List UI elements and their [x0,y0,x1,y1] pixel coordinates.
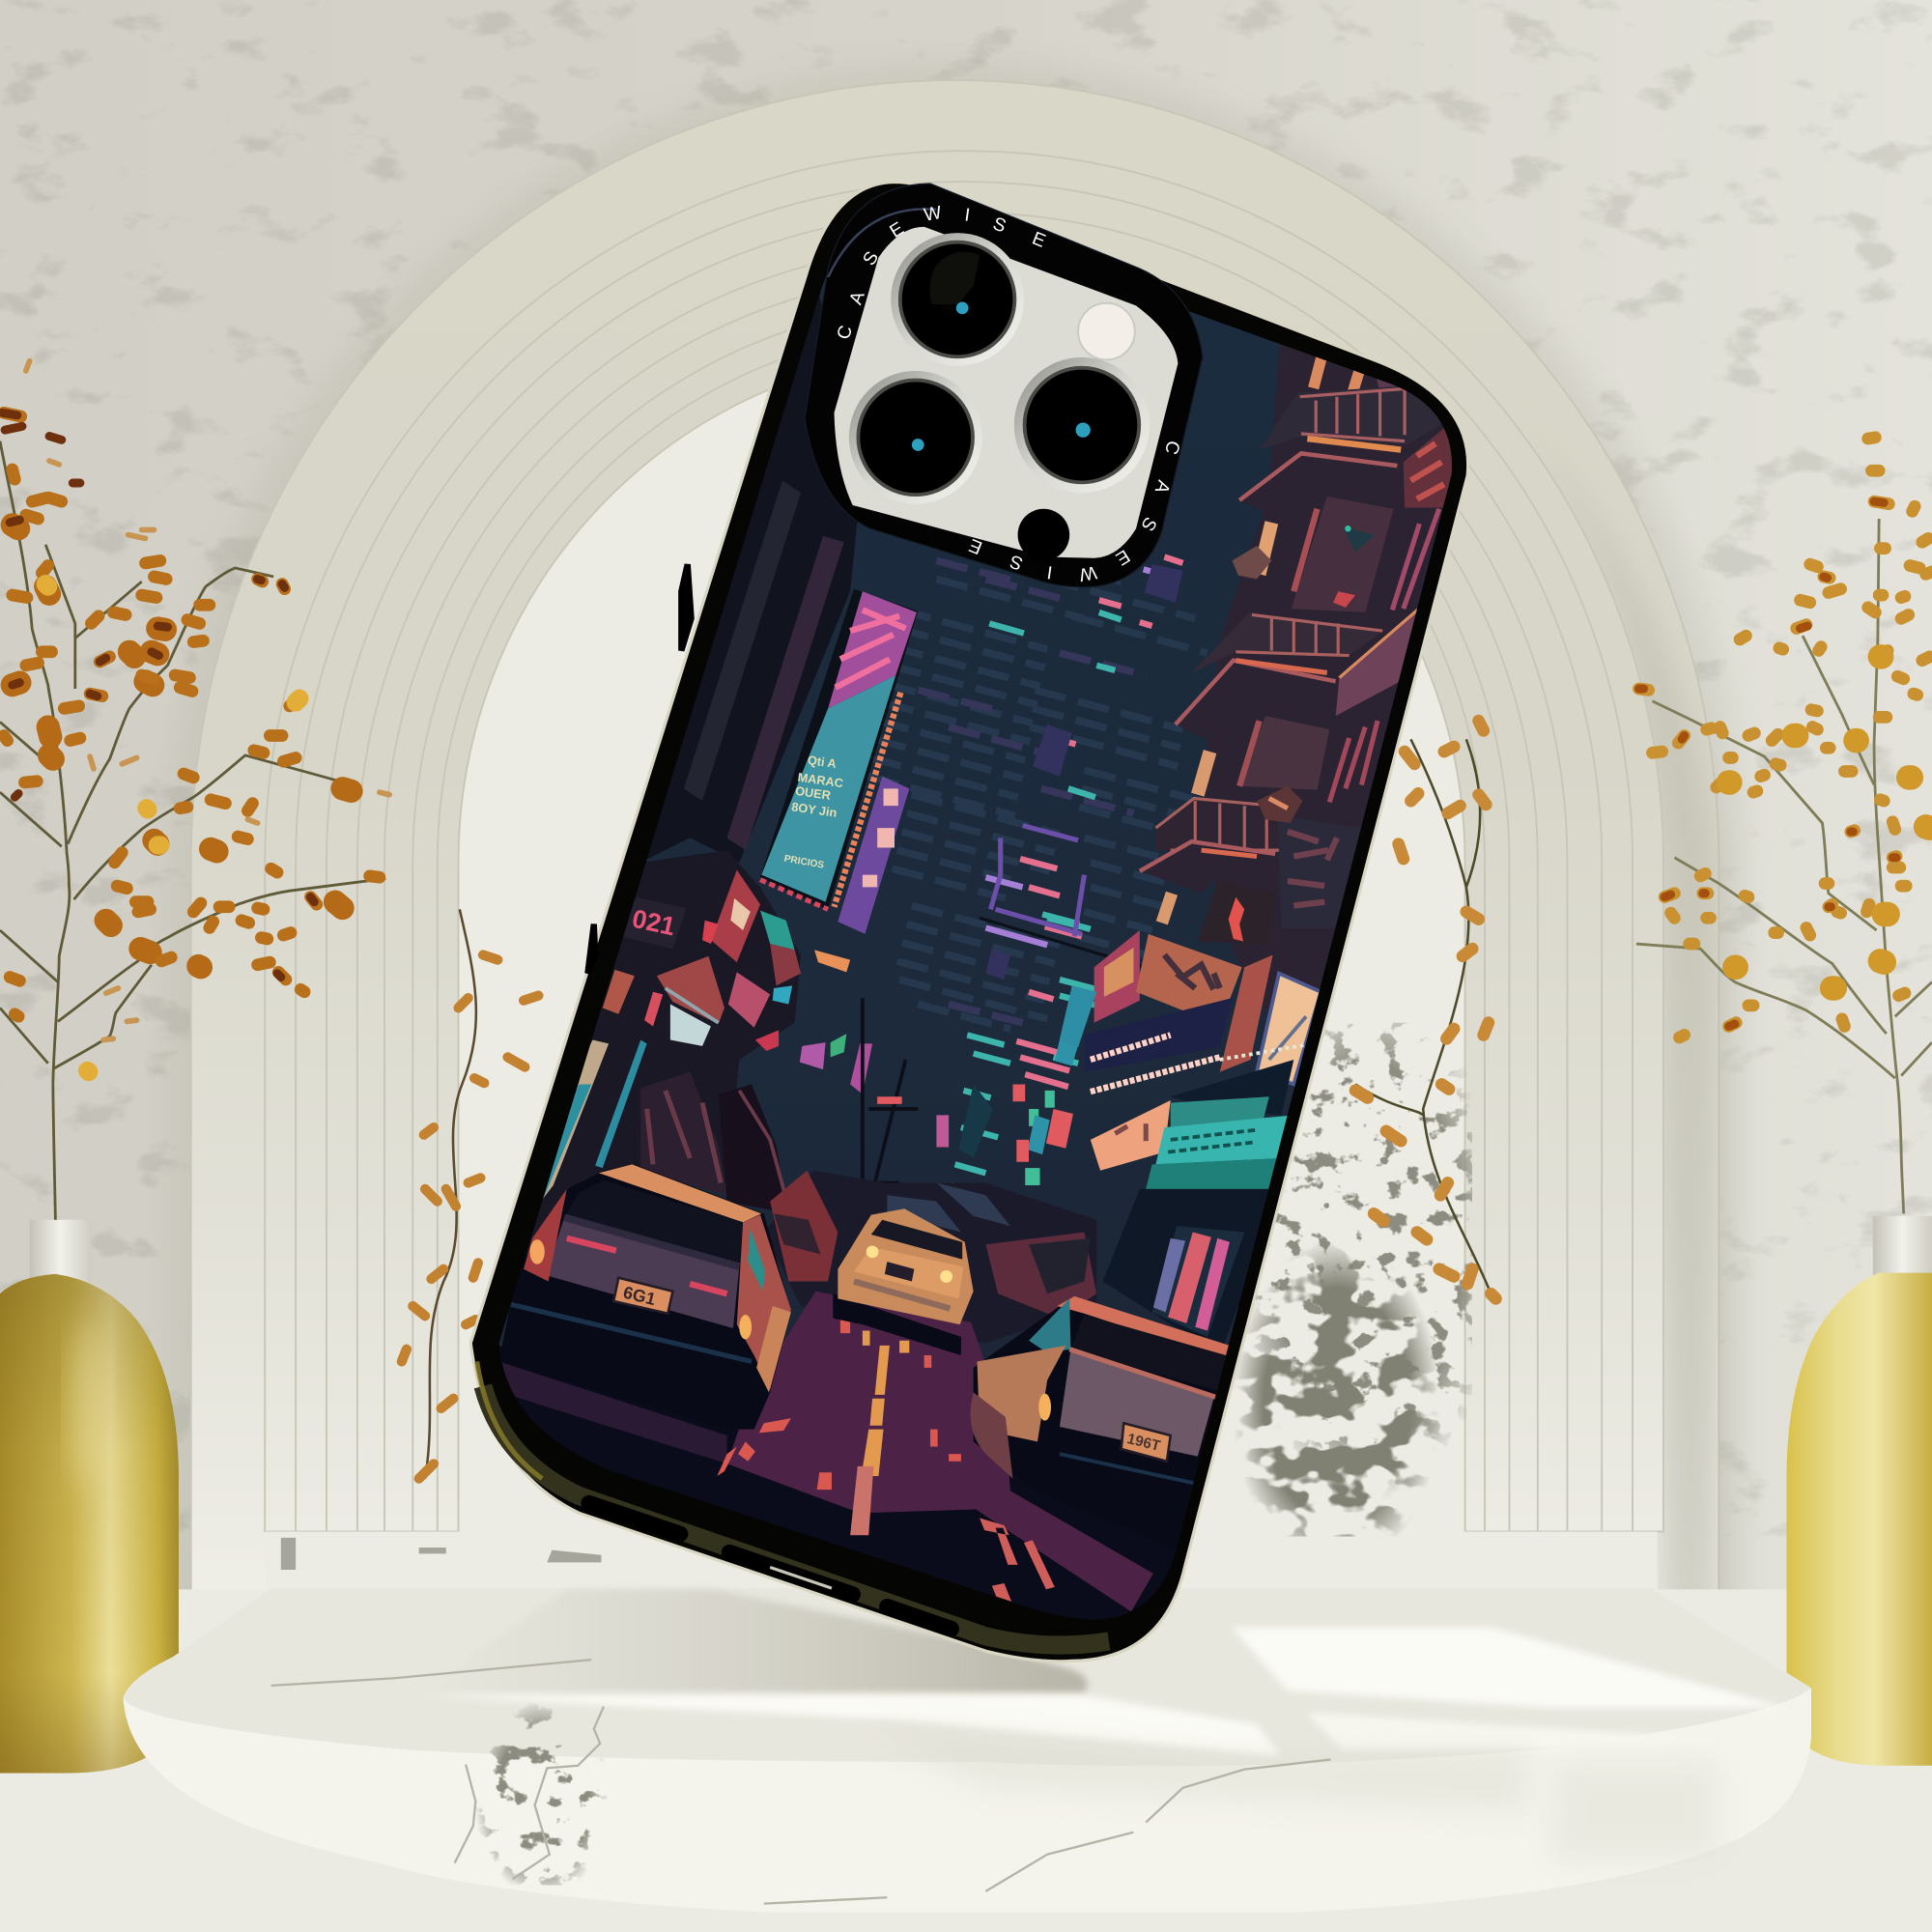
brand ring text: W [1078,561,1098,584]
billboard lettering: 8OY Jin [790,799,838,820]
top posts [1308,357,1364,390]
marquee lights [1084,998,1306,1115]
brand ring text: S [990,213,1009,237]
brand ring text: C [1160,438,1183,457]
brand ring text: C [834,323,857,342]
brand ring text: E [887,218,908,242]
dark foreground ground [487,1343,1233,1651]
stepped arch niche [166,62,1744,1651]
pedestrians [640,1072,727,1195]
balcony two [1174,608,1418,740]
printed pixel city artwork [498,275,1452,1619]
centre taxi [833,1208,974,1355]
billboard lettering [783,753,844,871]
orange sign block [1061,930,1321,1084]
medium leaves [4,412,380,1016]
licence plate left: 6G1 [621,1283,658,1309]
thin leaves [26,361,389,1040]
brand ring text: A [846,289,869,307]
brand ring text: I [963,205,971,226]
billboard lettering: Qti A [807,753,838,771]
main lens [891,233,1024,366]
round leaves [13,525,352,967]
floor [0,1589,1932,1932]
left street shops [526,850,872,1254]
brand ring text: A [1151,477,1174,497]
lower column [1198,716,1378,802]
bottom edge sheen [483,1386,1109,1645]
left taxi [499,1164,791,1430]
right lens [1014,357,1150,493]
balcony one [1238,386,1452,511]
brand ring text: S [1008,551,1026,574]
microphone dot [1018,509,1069,560]
021 sign [621,895,686,949]
left gold vase [0,1220,179,1773]
red figure window [1198,881,1275,945]
stems [0,441,385,1220]
distant skyline rows [867,542,1233,1029]
brand ring text [834,203,1183,584]
billboard [760,589,918,909]
right tower [1138,344,1452,1014]
case body with cream rim highlight [470,183,1468,1662]
mid-street signs [860,987,1078,1185]
camera island [805,184,1203,587]
right hanging vine [1355,721,1495,1298]
marble cracks on pedestal [271,1660,1331,1904]
left dark building [647,296,858,863]
dark leaves [3,412,314,977]
distant skyline highlights [952,557,1182,1191]
side buttons [587,564,692,974]
gold leaves [1638,438,1932,1037]
brand ring text: S [1136,513,1160,534]
left golden branch tree [0,361,389,1220]
billboard lettering: OUER [794,783,832,803]
left hanging vine [402,909,538,1479]
brand ring text: E [966,534,985,557]
left road strip [493,1361,727,1463]
camera plateau [835,227,1178,558]
lower-left lens [849,371,982,504]
brand ring text: E [1112,545,1133,569]
phone case [469,173,1491,1662]
billboard lettering: MARAC [797,770,844,790]
upper column with mask [1233,497,1439,612]
purple vertical sign [838,777,909,934]
brand ring text: E [1029,229,1048,252]
right golden branch tree [1636,438,1932,1213]
balcony three [1140,786,1361,927]
large gold leaves [1729,657,1929,988]
billboard lettering: PRICIOS [783,854,825,871]
brand ring text: I [1046,561,1054,582]
right gold vase [1786,1216,1932,1766]
right taxi [971,1296,1233,1552]
flash [1078,303,1135,359]
licence plate right: 196T [1125,1431,1162,1455]
deep amber leaves [1638,501,1896,1026]
light and shadow on pedestal [419,1589,1786,1861]
brand ring text: W [923,203,943,226]
road [727,1292,1153,1611]
stems [1636,519,1932,1213]
bottom port cutouts [589,1503,952,1629]
distant traffic [764,1171,1096,1343]
pedestal [124,1588,1811,1913]
bright gold leaves [45,584,299,1072]
brand ring text: S [859,248,883,270]
street-level signs [1091,1096,1293,1355]
021 sign: 021 [630,904,678,941]
road markings [717,1319,1055,1616]
marble veining on the niche [281,1023,1472,1570]
